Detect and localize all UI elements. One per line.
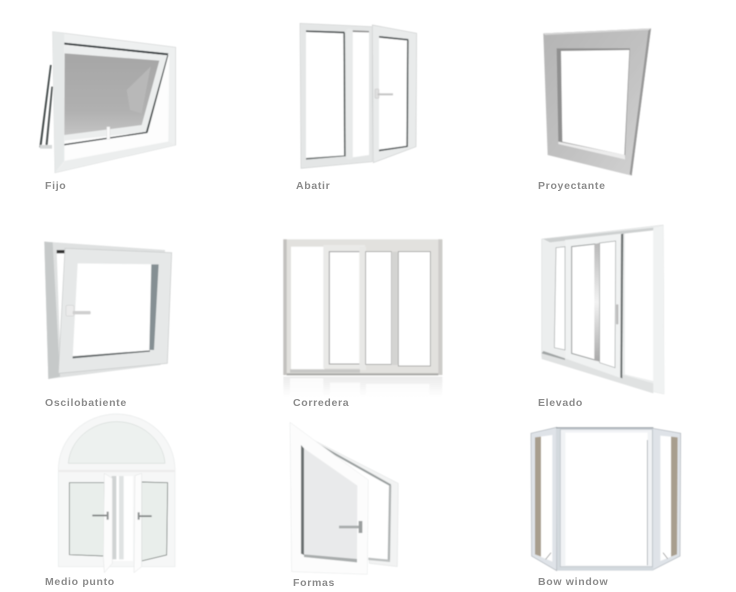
- label: Fijo: Fijo: [45, 180, 66, 192]
- icon: projecting window frame: [543, 28, 651, 176]
- reflection: [283, 377, 442, 397]
- panel: Fijo: [39, 32, 176, 192]
- panel: Abatir: [296, 23, 417, 192]
- panel: Elevado: [538, 225, 664, 409]
- panel: Oscilobatiente: [44, 242, 172, 409]
- label: Proyectante: Proyectante: [538, 180, 606, 192]
- label: Oscilobatiente: Oscilobatiente: [45, 397, 127, 409]
- panel: Bow window: [531, 427, 681, 588]
- label: Medio punto: Medio punto: [45, 576, 115, 588]
- icon: sliding window: [283, 239, 442, 397]
- label: Corredera: Corredera: [293, 397, 349, 409]
- label: Bow window: Bow window: [538, 576, 609, 588]
- icon: awning window: [39, 32, 176, 173]
- panel: Medio punto: [45, 414, 175, 588]
- panel: Corredera: [283, 239, 442, 409]
- label: Formas: Formas: [293, 577, 335, 589]
- icon: tilt and turn window: [44, 242, 172, 379]
- panel: Proyectante: [538, 28, 651, 192]
- panel: Formas: [290, 422, 398, 589]
- label: Abatir: Abatir: [296, 180, 330, 192]
- icon: shaped window: [290, 422, 398, 574]
- icon: casement window: [300, 23, 417, 168]
- icon: bow window: [531, 427, 681, 571]
- label: Elevado: Elevado: [538, 397, 583, 409]
- icon: arched window: [58, 414, 175, 573]
- icon: lift and slide door: [542, 225, 664, 394]
